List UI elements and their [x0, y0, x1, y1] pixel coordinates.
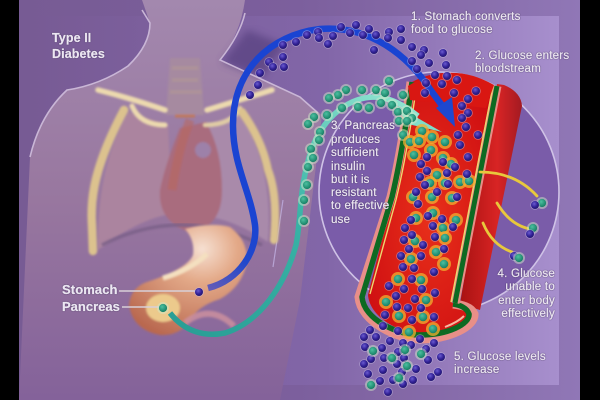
- shoulder shadow: [222, 30, 285, 78]
- diaphragm: [102, 225, 262, 245]
- ribs and clavicles: [92, 90, 275, 252]
- step 5 text: increase: [454, 364, 499, 376]
- insulin molecules: green dots along path: [298, 75, 418, 227]
- step 3 text: resistant: [331, 187, 377, 199]
- step 3 text: to effective: [331, 200, 389, 212]
- step 3 text: use: [331, 214, 350, 226]
- insulin molecules inside vessel: [379, 124, 476, 339]
- origin molecules: [157, 287, 204, 314]
- inner lighter panel: [40, 16, 559, 385]
- blue arrow: glucose path: [208, 29, 455, 288]
- vessel dome: [408, 73, 494, 108]
- lungs and chest: [98, 58, 269, 250]
- vessel wall bands: [359, 82, 497, 339]
- teal arrow: insulin path: [170, 97, 442, 334]
- human body silhouette: [19, 0, 322, 400]
- stomach and pancreas labels: [62, 282, 198, 314]
- step 3 text: insulin: [331, 161, 365, 173]
- molecules spilling below vessel: [359, 325, 446, 397]
- stomach and pancreas labels: Pancreas: [62, 299, 120, 314]
- step 3 text: but it is: [331, 174, 370, 186]
- vessel highlight: [445, 316, 464, 327]
- step 4 text: unable to: [505, 281, 555, 293]
- blood vessel: [359, 73, 522, 339]
- heart: [160, 122, 222, 232]
- spine: [166, 58, 204, 115]
- step 2 text: 2. Glucose enters: [475, 50, 569, 62]
- step 4 text: 4. Glucose: [498, 268, 555, 280]
- step 3 text: 3. Pancreas: [331, 120, 395, 132]
- step 3 text: sufficient: [331, 147, 379, 159]
- stomach and pancreas labels: Stomach: [62, 282, 118, 297]
- pancreas: [146, 294, 180, 322]
- glucose molecules: blue dots: [245, 20, 483, 162]
- molecules outside vessel in cell: [509, 197, 548, 264]
- step 4 text: enter body: [498, 295, 555, 307]
- step 1 text: 1. Stomach converts: [411, 11, 521, 23]
- stomach: [129, 225, 247, 335]
- title: Diabetes: [52, 47, 105, 61]
- body outline: [30, 10, 150, 157]
- step 2 text: bloodstream: [475, 63, 541, 75]
- glucose molecules inside vessel: [378, 152, 472, 336]
- cell circle: [319, 72, 559, 312]
- yellow arrows: glucose leaving: [480, 172, 537, 252]
- step 1 text: food to glucose: [411, 24, 493, 36]
- vessel outer wall: [460, 84, 522, 310]
- step 3 text: produces: [331, 134, 380, 146]
- intestine loop: [185, 314, 234, 326]
- step 4 text: effectively: [501, 308, 555, 320]
- title: Type II: [52, 31, 91, 45]
- step 5 text: 5. Glucose levels: [454, 351, 546, 363]
- vessel lumen: [368, 73, 494, 333]
